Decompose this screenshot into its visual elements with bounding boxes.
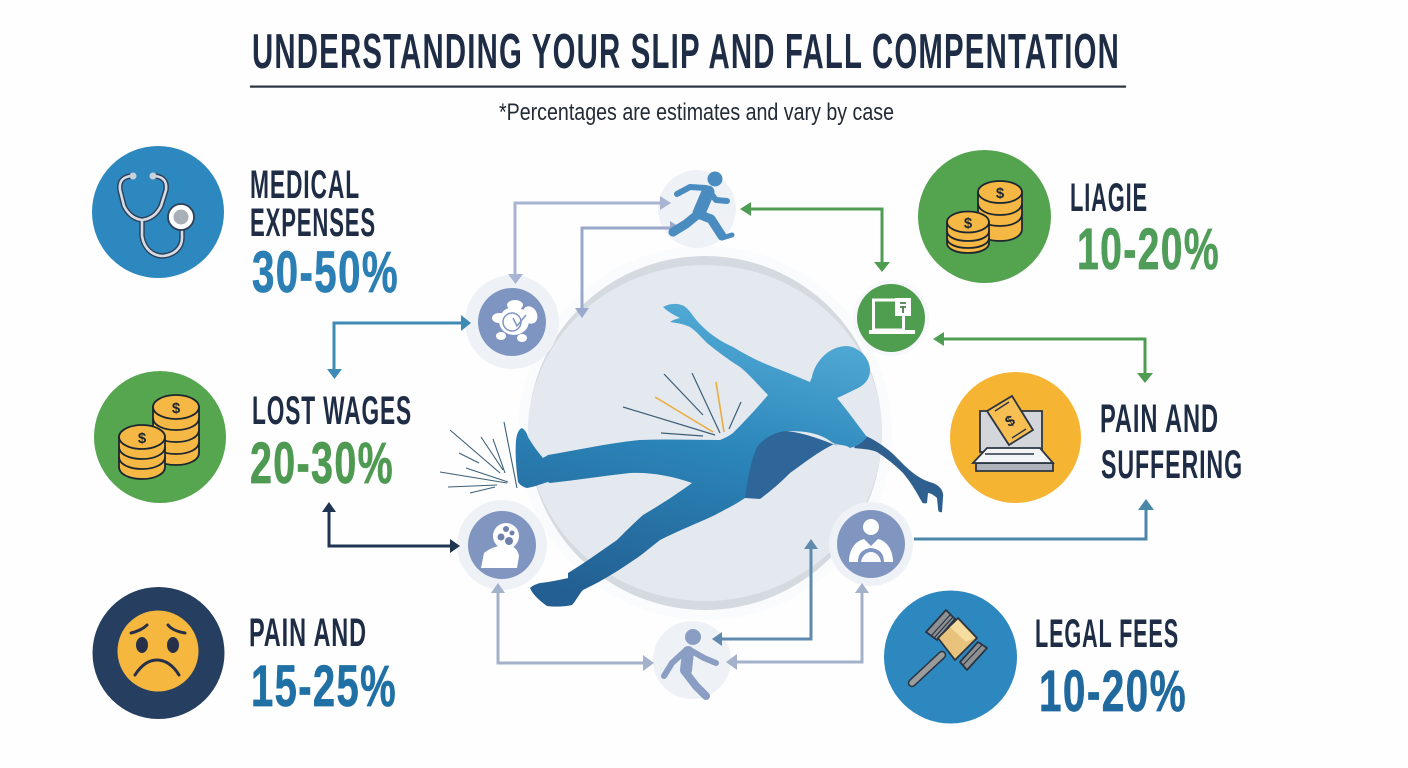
arrow: laptop node to pain and suffering	[933, 332, 1153, 383]
arrow: circle to runner lower	[575, 221, 681, 318]
label: pain and: PAIN AND	[249, 611, 367, 655]
panel: pain and suffering	[950, 372, 1243, 503]
arrow: lost wages to lower node	[322, 502, 460, 553]
label: medical expenses: MEDICAL	[250, 163, 360, 207]
node: doctor	[837, 510, 905, 578]
arrow: runner to laptop node	[740, 202, 890, 272]
icon: coins: $	[964, 215, 973, 232]
panel: legal fees	[884, 590, 1187, 724]
label: legal fees: LEGAL FEES	[1035, 612, 1179, 656]
icon: laptop with bill	[950, 372, 1081, 503]
icon: gavel	[884, 590, 1017, 724]
value: 10-20%: 10-20%	[1039, 659, 1187, 724]
impact sparks near hip	[623, 373, 741, 436]
panel: liagie	[918, 150, 1220, 283]
arrow: bottom runner to lower right node	[726, 583, 869, 670]
falling figure	[516, 304, 943, 607]
value: 30-50%: 30-50%	[252, 240, 399, 305]
impact sparks near foot	[440, 422, 517, 493]
node: person with head symbol	[468, 511, 536, 579]
icon: coins	[94, 371, 226, 503]
icon: coins: $	[172, 400, 181, 417]
value: 10-20%: 10-20%	[1077, 217, 1220, 282]
arrow: node to runner upper	[508, 196, 671, 284]
arrow: lower left node to bottom runner	[491, 583, 654, 671]
body and legs	[516, 304, 870, 607]
node: turtle icon	[478, 288, 546, 356]
icon: coins: $	[996, 185, 1005, 202]
far arm	[854, 434, 943, 512]
label: liagie: LIAGIE	[1070, 176, 1148, 220]
node: running person	[673, 172, 732, 238]
icon: coins	[918, 150, 1051, 283]
arrow: medical to lost wages and node	[327, 315, 471, 379]
central backdrop circle	[518, 246, 892, 620]
icon: sad face	[92, 587, 224, 719]
panel: lost wages	[94, 371, 412, 503]
node: laptop	[857, 284, 925, 352]
small node halos	[457, 170, 929, 699]
icon: laptop with bill: $	[1002, 412, 1019, 431]
arrow: bottom runner to backdrop circle	[712, 539, 818, 646]
value: 15-25%: 15-25%	[251, 654, 397, 719]
subtitle note: *Percentages are estimates and vary by case	[499, 99, 894, 126]
icon: stethoscope	[92, 146, 224, 278]
rear leg	[745, 431, 838, 499]
label: pain and suffering: PAIN AND	[1100, 397, 1219, 441]
arrow: lower right node to pain and suffering	[914, 499, 1154, 539]
panel: pain and suffering: SUFFERING	[1101, 443, 1243, 487]
panel: medical expenses: EXPENSES	[250, 201, 376, 245]
value: 20-30%: 20-30%	[250, 431, 394, 496]
icon: coins: $	[138, 430, 147, 447]
label: lost wages: LOST WAGES	[252, 389, 412, 433]
node: walking person	[664, 629, 716, 696]
panel: medical expenses	[92, 146, 399, 305]
panel: pain and	[92, 587, 397, 719]
